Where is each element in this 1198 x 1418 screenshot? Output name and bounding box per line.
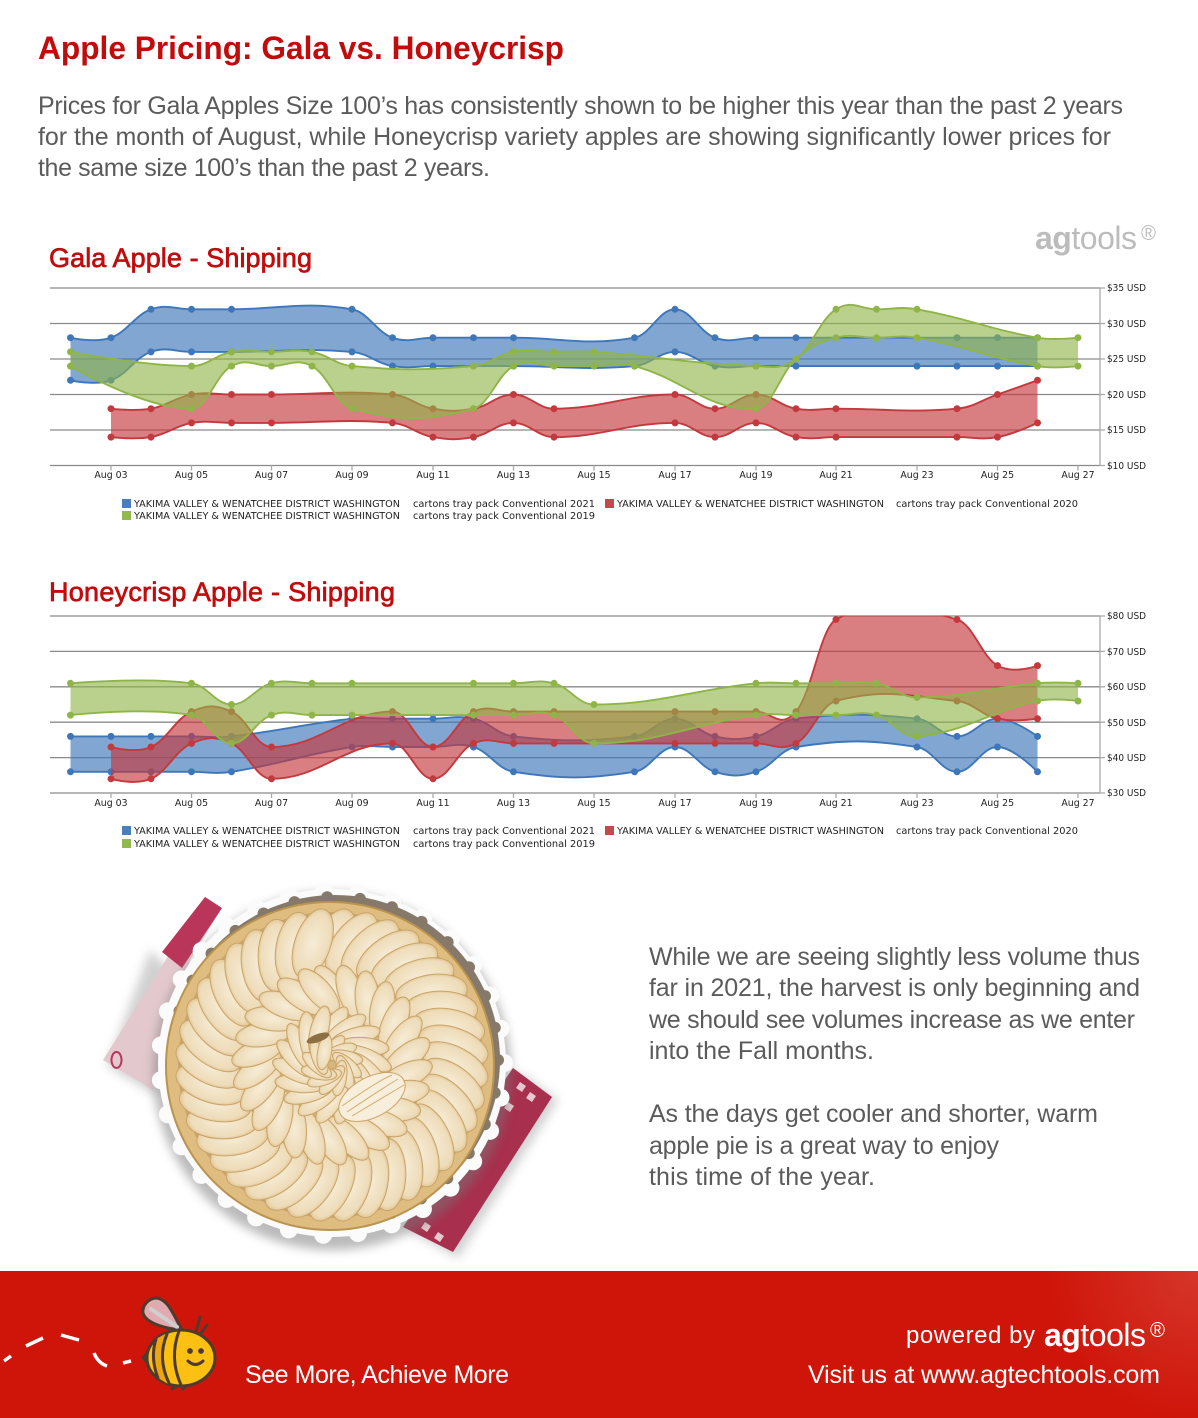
gridlines <box>50 616 1100 793</box>
legend: YAKIMA VALLEY & WENATCHEE DISTRICT WASHINGTON <box>133 499 400 510</box>
cloth: upper left <box>103 897 222 1090</box>
x axis labels: Aug 27 <box>1061 798 1095 809</box>
x axis labels: Aug 07 <box>255 470 288 481</box>
y axis labels <box>1107 283 1146 472</box>
y axis labels: $60 USD <box>1107 682 1146 693</box>
y axis labels: $10 USD <box>1107 461 1146 472</box>
text block: volume and harvest: apple pie is a great way to enjoy <box>649 1132 1000 1160</box>
powered by agtools <box>906 1317 1165 1353</box>
footer band <box>0 1271 1198 1418</box>
text block: volume and harvest <box>648 943 1140 1191</box>
chart: Gala Apple shipping prices <box>50 283 1146 522</box>
powered by agtools: ® <box>1150 1319 1165 1342</box>
cloth shadow <box>107 950 558 1258</box>
icon: bee <box>143 1298 215 1389</box>
intro paragraph: for the month of August, while Honeycrisp variety apples are showing significantly lower prices for <box>38 123 1111 151</box>
y axis labels: $30 USD <box>1107 788 1146 799</box>
x axis labels: Aug 05 <box>175 798 208 809</box>
text block: volume and harvest: this time of the year. <box>649 1163 875 1191</box>
chart: Honeycrisp Apple shipping prices <box>50 604 1146 850</box>
white dish with scalloped rim <box>158 889 506 1237</box>
x axis labels: Aug 19 <box>739 470 773 481</box>
intro paragraph: the same size 100’s than the past 2 years. <box>38 154 490 182</box>
y axis labels: $25 USD <box>1107 354 1146 365</box>
filling <box>178 912 484 1218</box>
text block: volume and harvest: we should see volumes increase as we enter <box>648 1006 1135 1034</box>
legend: YAKIMA VALLEY & WENATCHEE DISTRICT WASHINGTON <box>616 826 884 837</box>
heading: Gala chart: Gala Apple - Shipping <box>49 243 312 273</box>
text block: volume and harvest: into the Fall months. <box>649 1037 874 1065</box>
pastry crust <box>166 902 494 1230</box>
x axis labels: Aug 15 <box>577 798 611 809</box>
legend: cartons tray pack Conventional 2019 <box>413 839 595 850</box>
x axis labels: Aug 23 <box>900 798 934 809</box>
x axis labels: Aug 03 <box>94 470 128 481</box>
legend: cartons tray pack Conventional 2020 <box>896 499 1078 510</box>
x axis labels: Aug 23 <box>900 470 934 481</box>
legend: YAKIMA VALLEY & WENATCHEE DISTRICT WASHINGTON <box>133 826 400 837</box>
y axis labels: $20 USD <box>1107 390 1146 401</box>
y axis labels: $15 USD <box>1107 425 1146 436</box>
legend: cartons tray pack Conventional 2019 <box>413 511 595 522</box>
x axis labels: Aug 27 <box>1061 470 1095 481</box>
x axis labels <box>94 798 1095 809</box>
text block: volume and harvest: As the days get cooler and shorter, warm <box>649 1100 1098 1128</box>
x axis labels: Aug 15 <box>577 470 611 481</box>
intro paragraph: Prices for Gala Apples Size 100’s has consistently shown to be higher this year than the past 2 years <box>38 92 1123 120</box>
flight path dashes <box>4 1335 131 1366</box>
x axis labels: Aug 25 <box>981 470 1014 481</box>
cloth: lower right <box>403 1068 552 1252</box>
x axis labels: Aug 09 <box>335 798 369 809</box>
x axis labels: Aug 17 <box>658 798 692 809</box>
legend: cartons tray pack Conventional 2021 <box>413 499 595 510</box>
series: Honeycrisp 2021 <box>70 715 1038 777</box>
x axis labels: Aug 03 <box>94 798 128 809</box>
x axis labels: Aug 11 <box>416 798 450 809</box>
logo: agtools: ® <box>1141 222 1156 245</box>
y axis labels: $80 USD <box>1107 611 1146 622</box>
x axis labels: Aug 25 <box>981 798 1014 809</box>
legend: cartons tray pack Conventional 2020 <box>896 826 1078 837</box>
series: Gala 2019 <box>70 305 1078 418</box>
x axis labels: Aug 13 <box>497 798 530 809</box>
y axis labels: $70 USD <box>1107 647 1146 658</box>
legend: YAKIMA VALLEY & WENATCHEE DISTRICT WASHINGTON <box>133 511 400 522</box>
x axis labels: Aug 21 <box>819 798 853 809</box>
x axis labels: Aug 05 <box>175 470 208 481</box>
y axis labels: $30 USD <box>1107 319 1146 330</box>
legend: YAKIMA VALLEY & WENATCHEE DISTRICT WASHINGTON <box>133 839 400 850</box>
inner dish shadow <box>170 895 500 1225</box>
y axis labels <box>1107 611 1146 799</box>
x axis labels: Aug 13 <box>497 470 530 481</box>
x axis labels: Aug 17 <box>658 470 692 481</box>
title: Apple Pricing: Gala vs. Honeycrisp <box>38 30 564 66</box>
website: Visit us at www.agtechtools.com <box>808 1361 1160 1389</box>
tagline: See More, Achieve More <box>245 1361 509 1389</box>
x axis labels: Aug 11 <box>416 470 450 481</box>
series: Honeycrisp 2019 <box>70 680 1078 743</box>
legend: YAKIMA VALLEY & WENATCHEE DISTRICT WASHINGTON <box>616 499 884 510</box>
x axis labels: Aug 21 <box>819 470 853 481</box>
powered by agtools: agtools <box>1044 1317 1146 1353</box>
legend <box>122 499 1078 522</box>
series: Honeycrisp 2020 <box>111 604 1038 782</box>
illustration: apple pie on a cloth <box>103 889 558 1258</box>
text block: volume and harvest: While we are seeing slightly less volume thus <box>649 943 1140 971</box>
legend <box>122 826 1078 850</box>
heading: Honeycrisp chart: Honeycrisp Apple - Shipping <box>49 577 395 607</box>
y axis labels: $40 USD <box>1107 753 1146 764</box>
apple slices <box>166 899 498 1231</box>
y axis labels: $35 USD <box>1107 283 1146 294</box>
series: Gala 2021 <box>70 306 1038 383</box>
logo: agtools: agtools <box>1035 220 1137 256</box>
intro paragraph <box>38 92 1123 182</box>
series: Gala 2020 <box>111 380 1038 439</box>
gridlines <box>50 288 1100 466</box>
legend: cartons tray pack Conventional 2021 <box>413 826 595 837</box>
x axis labels: Aug 07 <box>255 798 288 809</box>
y axis labels: $50 USD <box>1107 718 1146 729</box>
text block: volume and harvest: far in 2021, the harvest is only beginning and <box>649 974 1140 1002</box>
x axis labels: Aug 19 <box>739 798 773 809</box>
dish shadow <box>153 892 511 1250</box>
x axis labels <box>94 470 1095 481</box>
powered by agtools: powered by <box>906 1322 1035 1349</box>
x axis labels: Aug 09 <box>335 470 369 481</box>
